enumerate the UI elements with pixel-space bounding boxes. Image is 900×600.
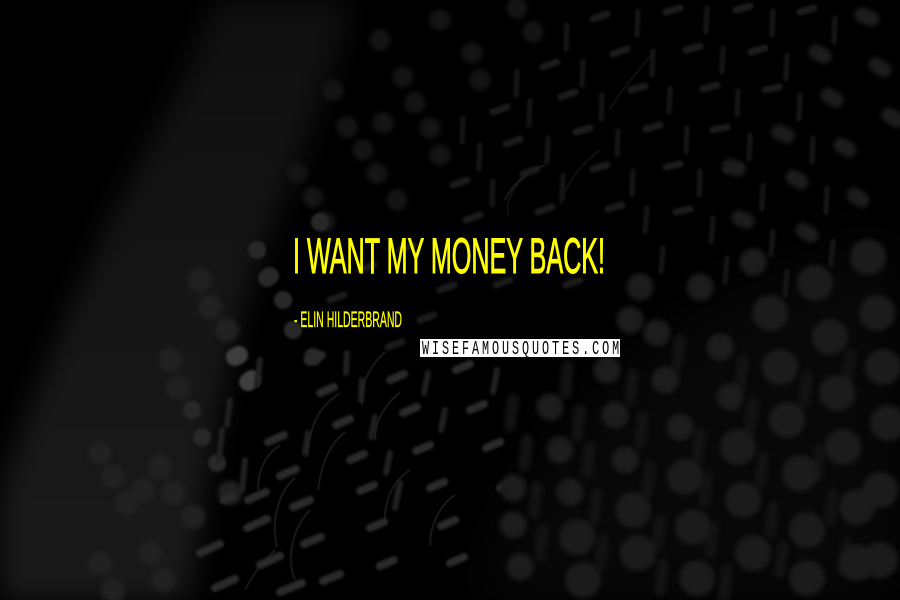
background: thin wires, centre xyxy=(245,50,655,590)
background: bright beads by the centre xyxy=(192,222,320,463)
background: upper vertical sticks xyxy=(462,8,835,295)
background: soft grey sweater edge xyxy=(0,0,350,600)
watermark badge: WISEFAMOUSQUOTES.COM xyxy=(422,338,619,360)
background: vertical knit sticks, centre xyxy=(219,353,497,508)
background: left knit beads xyxy=(100,280,230,590)
background: faint upper knit beads xyxy=(297,8,533,222)
background: vertical knit sticks, lower right xyxy=(510,340,850,596)
title: I WANT MY MONEY BACK! xyxy=(293,228,605,284)
background: dim glow lower right xyxy=(480,240,900,600)
background: upper hooks xyxy=(330,6,814,347)
background: right knit beads, lower xyxy=(513,262,753,567)
quote card: - ELIN HILDERBRAND xyxy=(294,307,402,332)
background: mesh hooks, centre xyxy=(200,355,514,592)
background: right knit beads, upper xyxy=(730,15,897,235)
